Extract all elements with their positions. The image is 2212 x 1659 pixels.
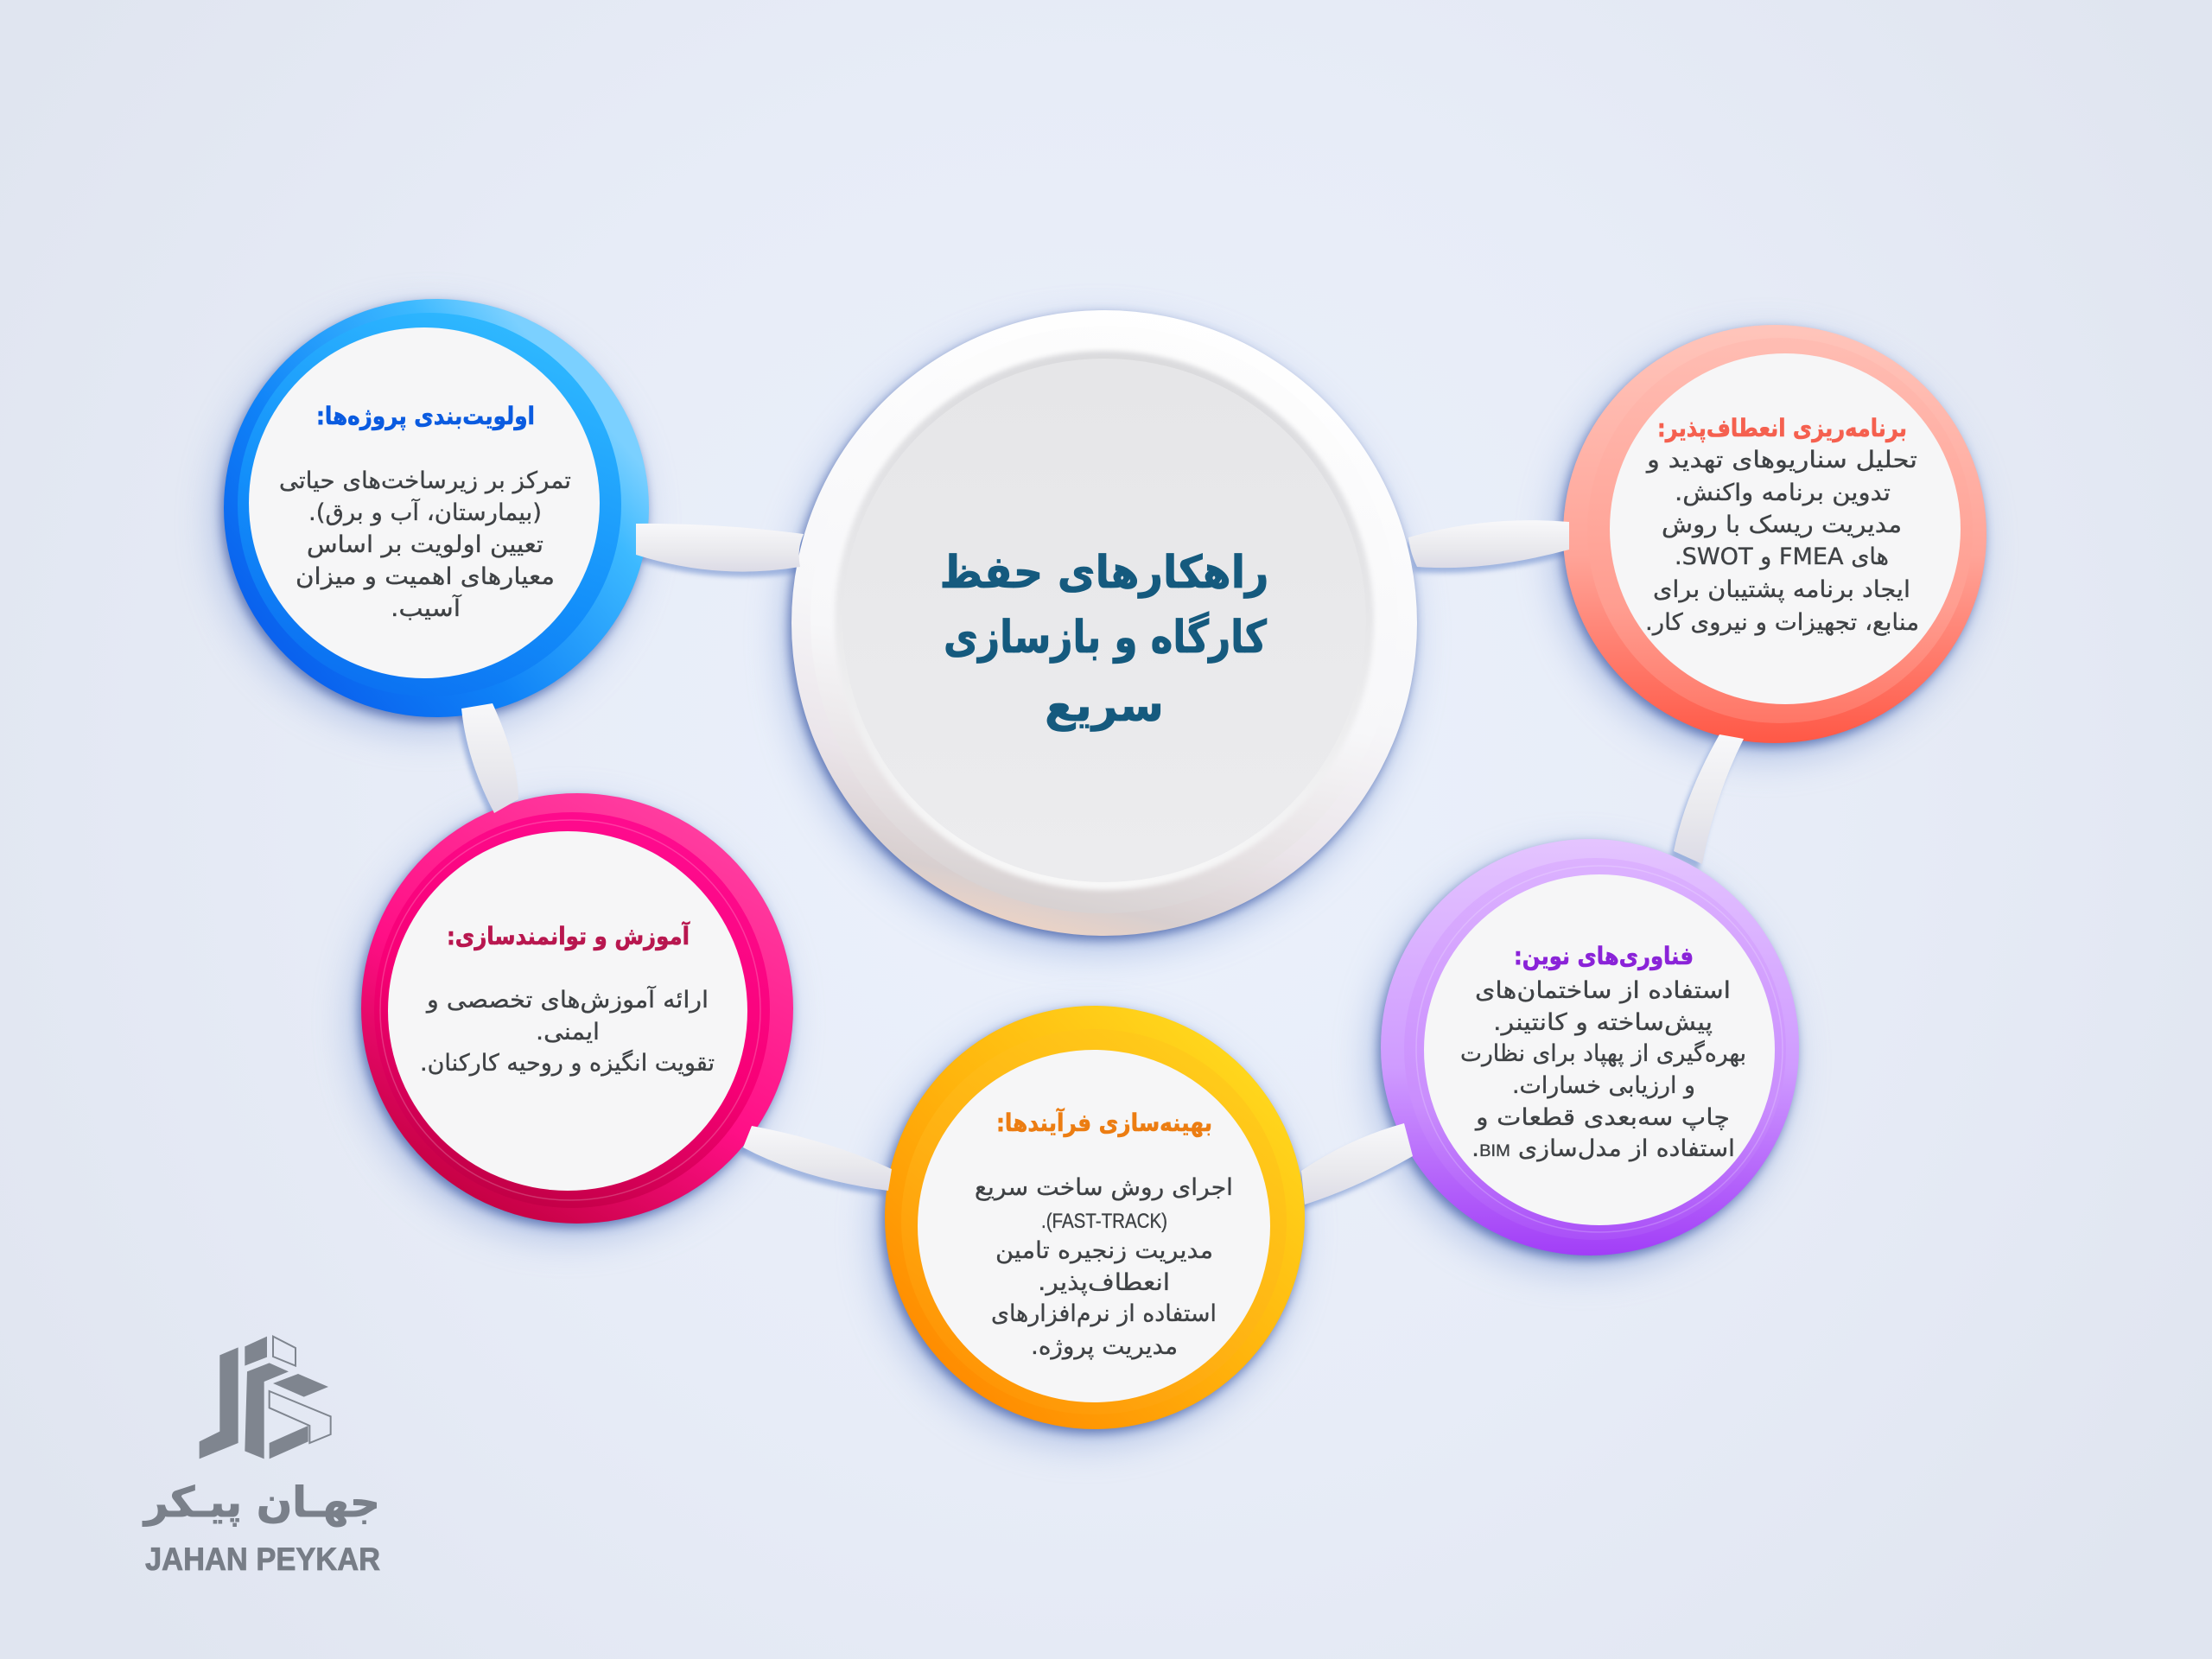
body text: تقویت انگیزه و روحیه کارکنان. (420, 1049, 715, 1077)
heading: اولویت‌بندی پروژه‌ها: (316, 402, 535, 430)
title: راهکارهای حفظ (940, 547, 1268, 599)
body text: آسیب. (391, 594, 462, 622)
panel: coral circle, resilient planning (1554, 325, 1986, 757)
body text: مدیریت پروژه. (1031, 1333, 1178, 1360)
heading: فناوری‌های نوین: (1514, 942, 1694, 970)
connector: pink circle to orange circle (743, 1126, 892, 1191)
body text: معیارهای اهمیت و میزان (296, 563, 555, 590)
body text: های FMEA و SWOT. (1675, 543, 1889, 570)
body text: اجرای روش ساخت سریع (975, 1174, 1233, 1201)
body text: بهره‌گیری از پهپاد برای نظارت (1460, 1039, 1746, 1067)
connector: blue circle to centre (636, 524, 804, 572)
body text: منابع، تجهیزات و نیروی کار. (1645, 609, 1919, 636)
body text: تدوین برنامه واکنش. (1675, 480, 1891, 506)
body text: (بیمارستان، آب و برق). (308, 499, 542, 526)
body text: استفاده از نرم‌افزارهای (991, 1300, 1217, 1327)
body text (1460, 977, 1746, 1162)
body text: (FAST-TRACK). (1041, 1210, 1167, 1233)
panel: pink circle, training and empowerment (353, 793, 793, 1237)
body text: مدیریت ریسک با روش (1662, 512, 1902, 538)
panel: purple circle, new technologies (1372, 839, 1799, 1269)
wordmark: Latin: JAHAN PEYKAR (145, 1541, 380, 1577)
heading: برنامه‌ریزی انعطاف‌پذیر: (1657, 414, 1907, 442)
body text: چاپ سه‌بعدی قطعات و (1474, 1104, 1730, 1131)
icon: building mark (200, 1337, 331, 1459)
body text: و ارزیابی خسارات. (1512, 1072, 1695, 1099)
title: کارگاه و بازسازی (944, 611, 1268, 664)
panel: blue circle, project prioritisation (215, 299, 649, 731)
body text: پیش‌ساخته و کانتینر. (1493, 1009, 1713, 1036)
connector shadows (458, 525, 1740, 1210)
body text: ایمنی. (536, 1019, 600, 1046)
body text: ایجاد برنامه پشتیبان برای (1653, 576, 1910, 603)
connector: blue circle to pink circle (461, 703, 518, 813)
wordmark: Persian: جهـان پیـکر (143, 1478, 380, 1527)
body text (279, 467, 571, 622)
body text: انعطاف‌پذیر. (1038, 1269, 1170, 1296)
body text: تمرکز بر زیرساخت‌های حیاتی (279, 467, 571, 494)
title: سریع (1045, 680, 1164, 732)
connector: centre to coral circle (1408, 520, 1569, 568)
panel: centre title disc (785, 310, 1417, 950)
body text: مدیریت زنجیره تامین (995, 1237, 1213, 1264)
body text: تعیین اولویت بر اساس (307, 531, 543, 558)
body text (420, 986, 715, 1077)
heading: بهینه‌سازی فرآیندها: (996, 1108, 1212, 1137)
body text: استفاده از مدل‌سازی BIM. (1471, 1135, 1735, 1162)
connector: purple circle to coral circle (1674, 734, 1744, 864)
heading: آموزش و توانمندسازی: (447, 921, 690, 950)
title (940, 547, 1268, 732)
body text (975, 1174, 1233, 1360)
panel: orange circle, process optimisation (875, 1006, 1305, 1443)
body text: ارائه آموزش‌های تخصصی و (425, 986, 709, 1014)
connector: orange circle to purple circle (1301, 1123, 1413, 1205)
body text (1645, 447, 1919, 636)
body text: تحلیل سناریوهای تهدید و (1645, 447, 1917, 474)
logo: Jahan Peykar (143, 1337, 380, 1577)
body text: استفاده از ساختمان‌های (1475, 977, 1731, 1004)
